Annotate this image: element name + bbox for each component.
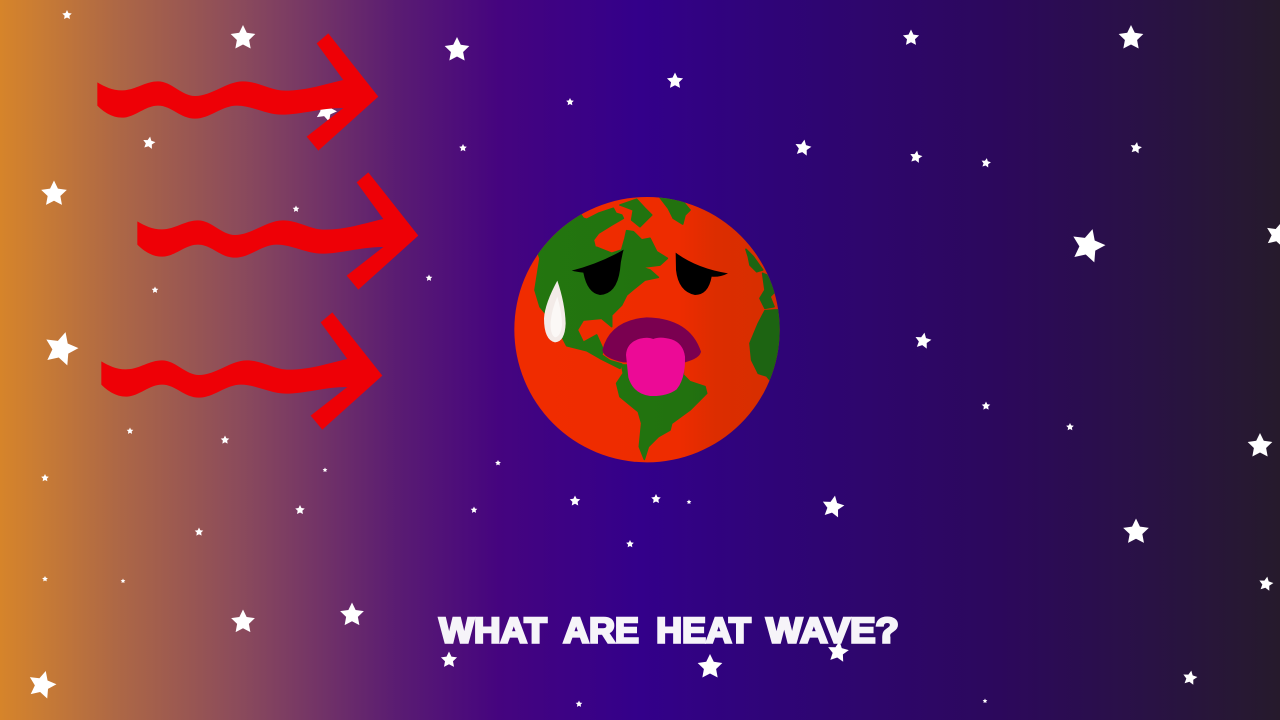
continents: [533, 197, 787, 459]
title: WAVE?: [766, 612, 899, 651]
title: [439, 612, 899, 651]
title: WHAT: [439, 612, 547, 651]
arrow: top heat wave: [97, 33, 378, 151]
sweat drop: [544, 281, 566, 342]
earth character: [514, 197, 787, 462]
mouth: [602, 317, 701, 362]
right eye: [676, 253, 728, 295]
left eye: [572, 250, 624, 295]
arrow: bottom heat wave: [101, 312, 382, 430]
title: ARE: [563, 612, 639, 651]
tongue: [626, 338, 685, 396]
title: HEAT: [656, 612, 751, 651]
arrow: middle heat wave: [137, 172, 418, 290]
globe ocean: [514, 197, 780, 462]
